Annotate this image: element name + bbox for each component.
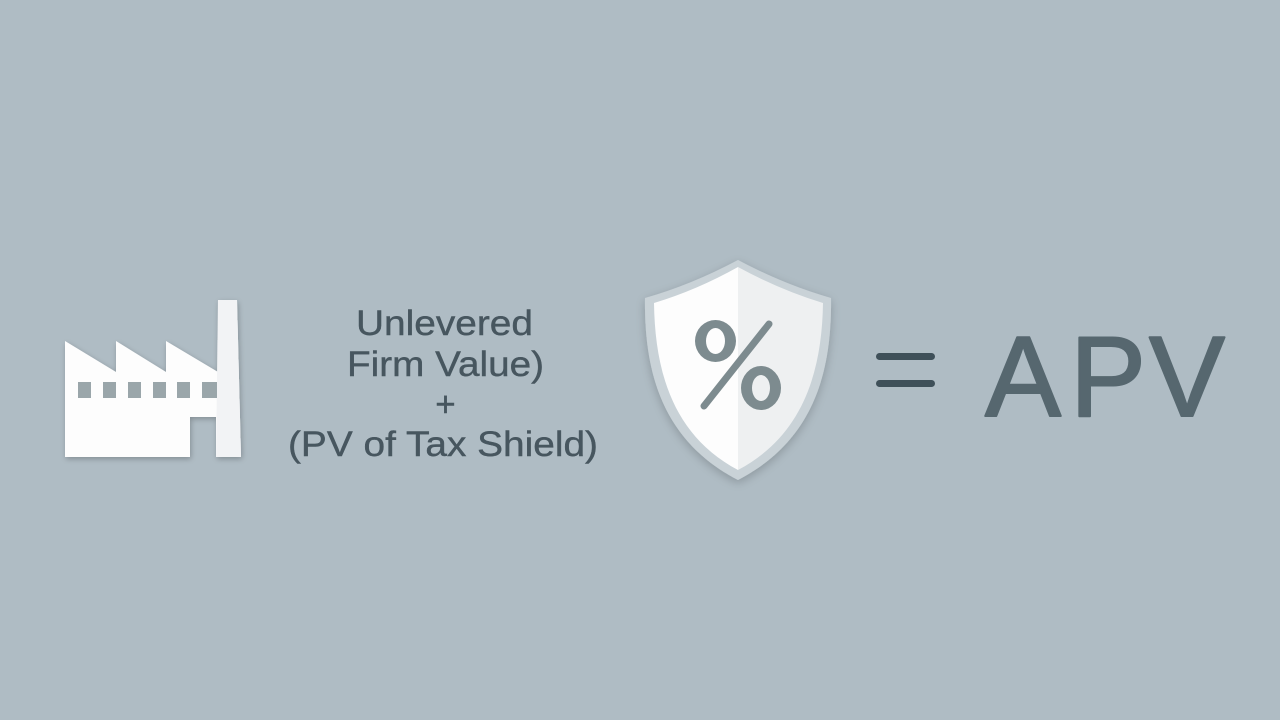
percent sign — [695, 320, 781, 410]
shield outer rim — [645, 260, 831, 480]
shield right half — [738, 267, 823, 470]
icon: shield with percent — [645, 260, 831, 480]
result: APV: APV — [985, 314, 1225, 441]
equals sign — [876, 353, 935, 387]
text block: formula: + — [435, 385, 456, 424]
text block: formula: Firm Value) — [347, 345, 544, 384]
shield left half — [654, 267, 738, 470]
text block: formula: (PV of Tax Shield) — [288, 425, 598, 464]
icon: factory — [65, 300, 241, 457]
text block: formula: Unlevered — [356, 304, 533, 343]
text block: formula — [288, 304, 598, 464]
